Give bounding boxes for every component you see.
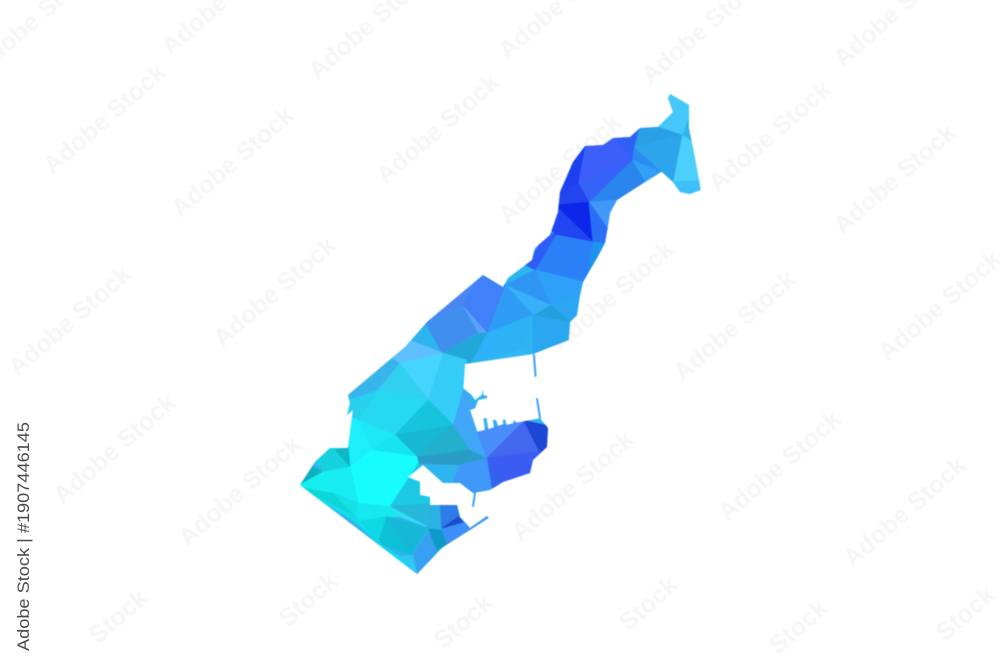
western and southern mesh: [297, 338, 553, 577]
watermark pattern: Stock: [429, 589, 498, 655]
watermark pattern: Adobe Stock: [828, 118, 962, 240]
watermark pattern: Adobe Stock: [506, 425, 640, 547]
harbour breakwater lines: [473, 355, 540, 506]
central ridge: [535, 270, 585, 305]
northern dark blue strip: [589, 160, 645, 202]
map: low-poly Monaco: [290, 85, 710, 580]
low-poly mesh clipped to the coastline: [290, 85, 710, 580]
watermark pattern: Adobe Stock: [713, 405, 847, 527]
watermark pattern: Adobe Stock: [38, 58, 172, 180]
watermark pattern: Adobe Stock: [208, 231, 342, 353]
watermark pattern: Stock: [614, 571, 683, 637]
watermark pattern: Adobe Stock: [3, 260, 137, 382]
watermark pattern: Adobe Stock: [48, 388, 182, 510]
watermark pattern: Adobe Stock: [703, 75, 837, 197]
watermark pattern: Stock: [84, 584, 153, 650]
watermark pattern: Adobe Stock: [546, 235, 680, 357]
eastern tip: [659, 95, 690, 135]
watermark pattern: Adobe Stock: [668, 265, 802, 387]
watermark pattern: Stock: [931, 581, 1000, 647]
side credit text: Adobe Stock | #1907446145: [14, 422, 33, 651]
watermark pattern: Adobe Stock: [493, 108, 627, 230]
watermark pattern: Adobe Stock: [838, 451, 972, 573]
watermark pattern: Stock: [274, 567, 343, 633]
watermark pattern: Stock: [764, 594, 833, 660]
watermark pattern: Adobe Stock: [173, 430, 307, 552]
watermark pattern: Adobe Stock: [371, 68, 505, 190]
watermark pattern: Adobe Stock: [166, 101, 300, 223]
